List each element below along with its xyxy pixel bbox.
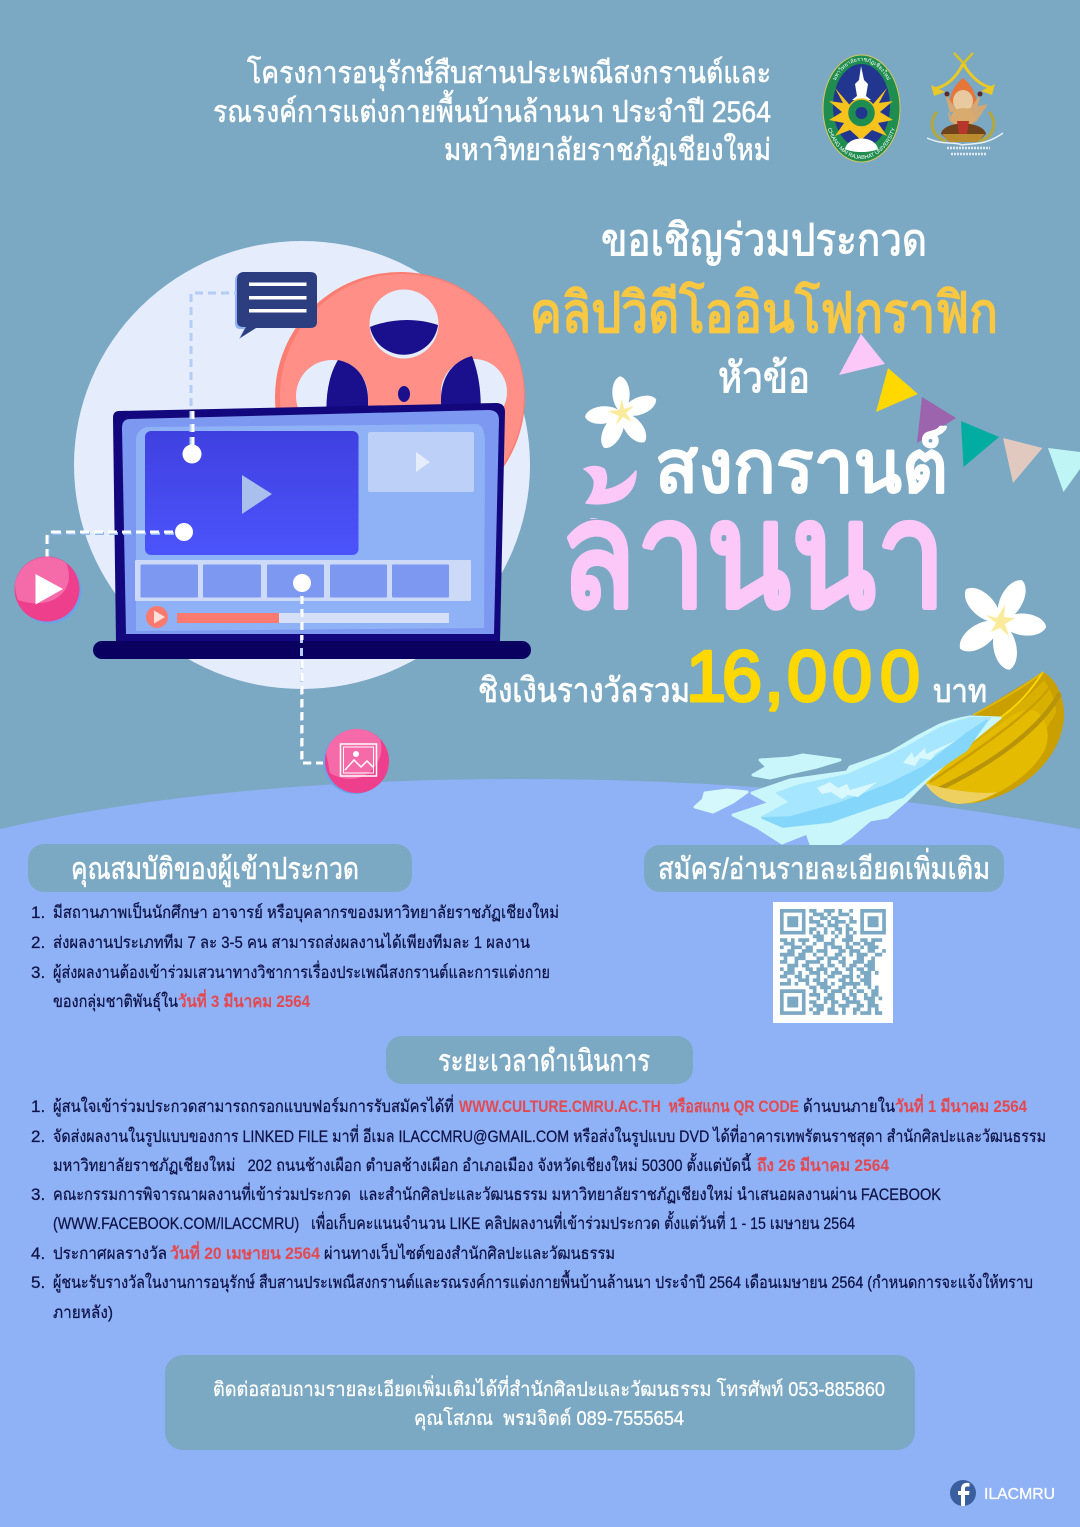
header title: โครงการอนุรักษ์สืบสานประเพณีสงกรานต์และ (247, 55, 771, 92)
title: Lanna: ล้านนา (560, 471, 946, 639)
panel: qualifications heading (28, 844, 412, 892)
heading: topic: หัวข้อ (718, 354, 810, 401)
schedule list: คณะกรรมการพิจารณาผลงานที่เข้าร่วมประกวด และสำนักศิลปะและวัฒนธรรม มหาวิทยาลัยราชภัฏเชียงใหม่ นำเสนอผลงานผ่าน FACEBOOK (53, 1182, 942, 1204)
qualifications list: มีสถานภาพเป็นนักศึกษา อาจารย์ หรือบุคลากรของมหาวิทยาลัยราชภัฏเชียงใหม่ (53, 901, 559, 923)
schedule list: วันที่ 1 มีนาคม 2564 (895, 1094, 1027, 1116)
schedule list: มหาวิทยาลัยราชภัฏเชียงใหม่ 202 ถนนช้างเผือก ตำบลช้างเผือก อำเภอเมือง จังหวัดเชียงใหม่ 50300 ตั้งแต่บัดนี้ (53, 1153, 751, 1175)
speech bubble icon (235, 272, 317, 339)
qualifications list (31, 901, 559, 1012)
filmstrip (135, 560, 471, 601)
logo: Chiang Mai Rajabhat University (822, 54, 900, 162)
heading: infographic clip: คลิปวิดีโออินโฟกราฟิก (530, 281, 998, 344)
video progress bar (146, 606, 449, 628)
qualifications list: 1. (31, 903, 45, 922)
schedule list: 3. (31, 1185, 45, 1204)
laptop body (113, 403, 505, 641)
header title (213, 55, 771, 167)
icon: play button (14, 556, 82, 624)
panel: schedule heading (386, 1036, 693, 1084)
background circle (74, 241, 530, 689)
panel: qualifications heading: คุณสมบัติของผู้เข้าประกวด (71, 853, 359, 888)
logo: Chiang Mai Rajabhat University: มหาวิทยาลัยราชภัฏเชียงใหม่ (833, 58, 891, 80)
water stream (733, 717, 1000, 850)
prize line: ชิงเงินรางวัลรวม (478, 672, 690, 710)
schedule list: WWW.CULTURE.CMRU.AC.TH หรือสแกน QR CODE (459, 1096, 799, 1116)
panel: schedule heading: ระยะเวลาดำเนินการ (438, 1045, 650, 1078)
schedule list: ถึง 26 มีนาคม 2564 (757, 1155, 889, 1175)
schedule list: ประกาศผลรางวัล (53, 1244, 167, 1263)
dashed connector lines (47, 293, 325, 763)
panel: contact information: ติดต่อสอบถามรายละเอียดเพิ่มเติมได้ที่สำนักศิลปะและวัฒนธรรม โทรศัพท์ 053-885860 (213, 1375, 885, 1401)
schedule list: 2. (31, 1127, 45, 1146)
bunting flags (839, 334, 1080, 492)
schedule list: 4. (31, 1244, 45, 1263)
logo: Chiang Mai Rajabhat University: CHIANG MAI RAJABHAT UNIVERSITY (828, 127, 895, 159)
schedule list: ผู้สนใจเข้าร่วมประกวดสามารถกรอกแบบฟอร์มการรับสมัครได้ที่ (53, 1094, 454, 1117)
qualifications list: วันที่ 3 มีนาคม 2564 (178, 989, 310, 1011)
panel: contact information (165, 1355, 915, 1450)
qualifications list: ของกลุ่มชาติพันธุ์ใน (53, 991, 178, 1012)
schedule list: 1. (31, 1097, 45, 1116)
title: Songkran: สงกรานต์ (655, 425, 948, 508)
qualifications list: 3. (31, 963, 45, 982)
schedule list (31, 1094, 1046, 1322)
connector dots (175, 444, 311, 592)
heading: invitation: ขอเชิญร่วมประกวด (601, 216, 927, 265)
film reel (275, 272, 525, 522)
panel: register heading (644, 845, 1004, 892)
Facebook contact (950, 1480, 1055, 1506)
qualifications list: 2. (31, 933, 45, 952)
schedule list: ด้านบนภายใน (803, 1096, 895, 1116)
flower: upper plumeria (584, 376, 659, 452)
thumbnail video (368, 432, 474, 492)
illustration: golden bowl pouring water (695, 672, 1064, 850)
illustration: laptop video editor (14, 241, 531, 794)
schedule list: ผ่านทางเว็บไซต์ของสำนักศิลปะและวัฒนธรรม (324, 1242, 615, 1263)
title: Lanna (567, 466, 937, 611)
logo: Ganesha emblem (927, 53, 1003, 154)
prize line: 16,000 (686, 637, 920, 717)
schedule list: วันที่ 20 เมษายน 2564 (170, 1241, 320, 1263)
bowl (925, 672, 1064, 804)
panel: contact information: คุณโสภณ พรมจิตต์ 089-7555654 (414, 1407, 684, 1431)
icon: image button (323, 729, 389, 794)
qualifications list: ผู้ส่งผลงานต้องเข้าร่วมเสวนาทางวิชาการเรื่องประเพณีสงกรานต์และการแต่งกาย (53, 960, 550, 983)
header title: มหาวิทยาลัยราชภัฏเชียงใหม่ (444, 133, 771, 167)
lower background panel (0, 779, 1080, 1527)
main video panel (145, 431, 358, 555)
header title: รณรงค์การแต่งกายพื้นบ้านล้านนา ประจำปี 2564 (213, 90, 771, 129)
schedule list: (WWW.FACEBOOK.COM/ILACCMRU) เพื่อเก็บคะแนนจำนวน LIKE คลิปผลงานที่เข้าร่วมประกวด ตั้งแต่วันที่ 1 - 15 เมษายน 2564 (53, 1211, 855, 1233)
Facebook contact: ILACMRU (984, 1486, 1055, 1503)
schedule list: ภายหลัง) (53, 1303, 113, 1322)
panel: register heading: สมัคร/อ่านรายละเอียดเพิ่มเติม (658, 848, 990, 886)
prize line: บาท (933, 673, 987, 709)
qualifications list: ส่งผลงานประเภททีม 7 ละ 3-5 คน สามารถส่งผลงานได้เพียงทีมละ 1 ผลงาน (53, 932, 530, 952)
prize line (478, 637, 987, 717)
flower: lower plumeria (954, 575, 1047, 672)
laptop base (93, 641, 531, 659)
water splash (753, 755, 840, 778)
schedule list: 5. (31, 1273, 45, 1292)
QR code (773, 902, 893, 1023)
